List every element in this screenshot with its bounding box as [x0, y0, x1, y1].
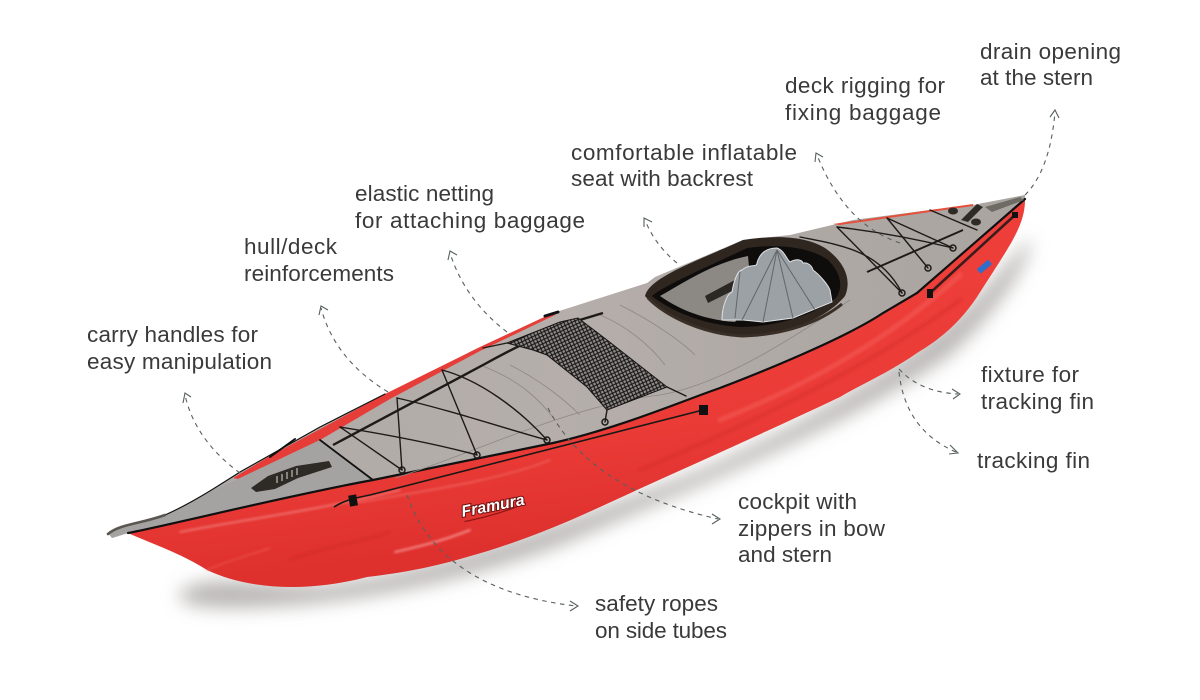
- arrow: drain opening: [1025, 110, 1059, 195]
- label: tracking fin: tracking fin: [977, 448, 1090, 473]
- label: carry handles: carry handles for: [87, 322, 258, 347]
- label: safety ropes: [595, 591, 727, 643]
- hull highlights: [180, 275, 960, 570]
- label: cockpit zippers: [738, 489, 886, 567]
- label: elastic netting: [355, 181, 585, 233]
- red hull: [128, 197, 1025, 587]
- ground shadow under hull: [179, 238, 1030, 608]
- kayak illustration: [108, 195, 1030, 608]
- arrow: deck rigging: [815, 153, 900, 243]
- label: safety ropes: safety ropes: [595, 591, 718, 616]
- label: hull/deck reinforcements: hull/deck: [244, 234, 338, 259]
- red top stripe: [233, 313, 555, 479]
- arrow: safety ropes: [407, 495, 578, 611]
- label: elastic netting: for attaching baggage: [355, 208, 585, 233]
- deck seams: [395, 300, 850, 478]
- label: deck rigging: deck rigging for: [785, 73, 946, 98]
- arrow: elastic netting: [448, 251, 507, 332]
- label: deck rigging: fixing baggage: [785, 100, 941, 125]
- label: elastic netting: elastic netting: [355, 181, 494, 206]
- label: inflatable seat: comfortable inflatable: [571, 140, 797, 165]
- inflatable seat backrest: [722, 248, 832, 322]
- elastic cargo net: [483, 318, 686, 425]
- label: fixture for tracking fin: tracking fin: [981, 389, 1094, 414]
- stern fittings: [948, 197, 1024, 226]
- label: hull/deck reinforcements: [244, 234, 394, 286]
- bow bungee rigging: [333, 313, 603, 473]
- arrow: tracking fin: [899, 372, 958, 454]
- label: safety ropes: on side tubes: [595, 618, 727, 643]
- label: deck rigging: [785, 73, 946, 125]
- arrow: hull/deck reinforcements: [319, 306, 388, 392]
- label: cockpit zippers: cockpit with: [738, 489, 857, 514]
- label: cockpit zippers: and stern: [738, 542, 832, 567]
- arrow: carry handles: [183, 393, 240, 473]
- arrow: cockpit zippers: [548, 408, 720, 524]
- label: drain opening: drain opening: [980, 39, 1121, 64]
- label: hull/deck reinforcements: reinforcements: [244, 261, 394, 286]
- cockpit with rim: [645, 237, 848, 336]
- label: drain opening: at the stern: [980, 65, 1093, 90]
- label: inflatable seat: seat with backrest: [571, 166, 754, 191]
- deck edge lines: [108, 199, 1025, 534]
- bow carry handle: [251, 461, 332, 492]
- grey deck: [108, 195, 1025, 538]
- side safety ropes: [334, 212, 1018, 507]
- arrow: inflatable seat: [644, 218, 677, 263]
- label: inflatable seat: [571, 140, 797, 191]
- label: carry handles: [87, 322, 272, 374]
- label: carry handles: easy manipulation: [87, 349, 272, 374]
- blue badge: [977, 260, 992, 274]
- Framura logo: Framura: [460, 492, 526, 521]
- bow grey panel: [108, 440, 373, 538]
- stern bungee rigging: [800, 210, 977, 296]
- label: drain opening: [980, 39, 1121, 90]
- label: fixture for tracking fin: fixture for: [981, 362, 1080, 387]
- arrow: fixture for tracking fin: [899, 369, 960, 399]
- label: fixture for tracking fin: [981, 362, 1094, 414]
- label: cockpit zippers: zippers in bow: [738, 516, 886, 541]
